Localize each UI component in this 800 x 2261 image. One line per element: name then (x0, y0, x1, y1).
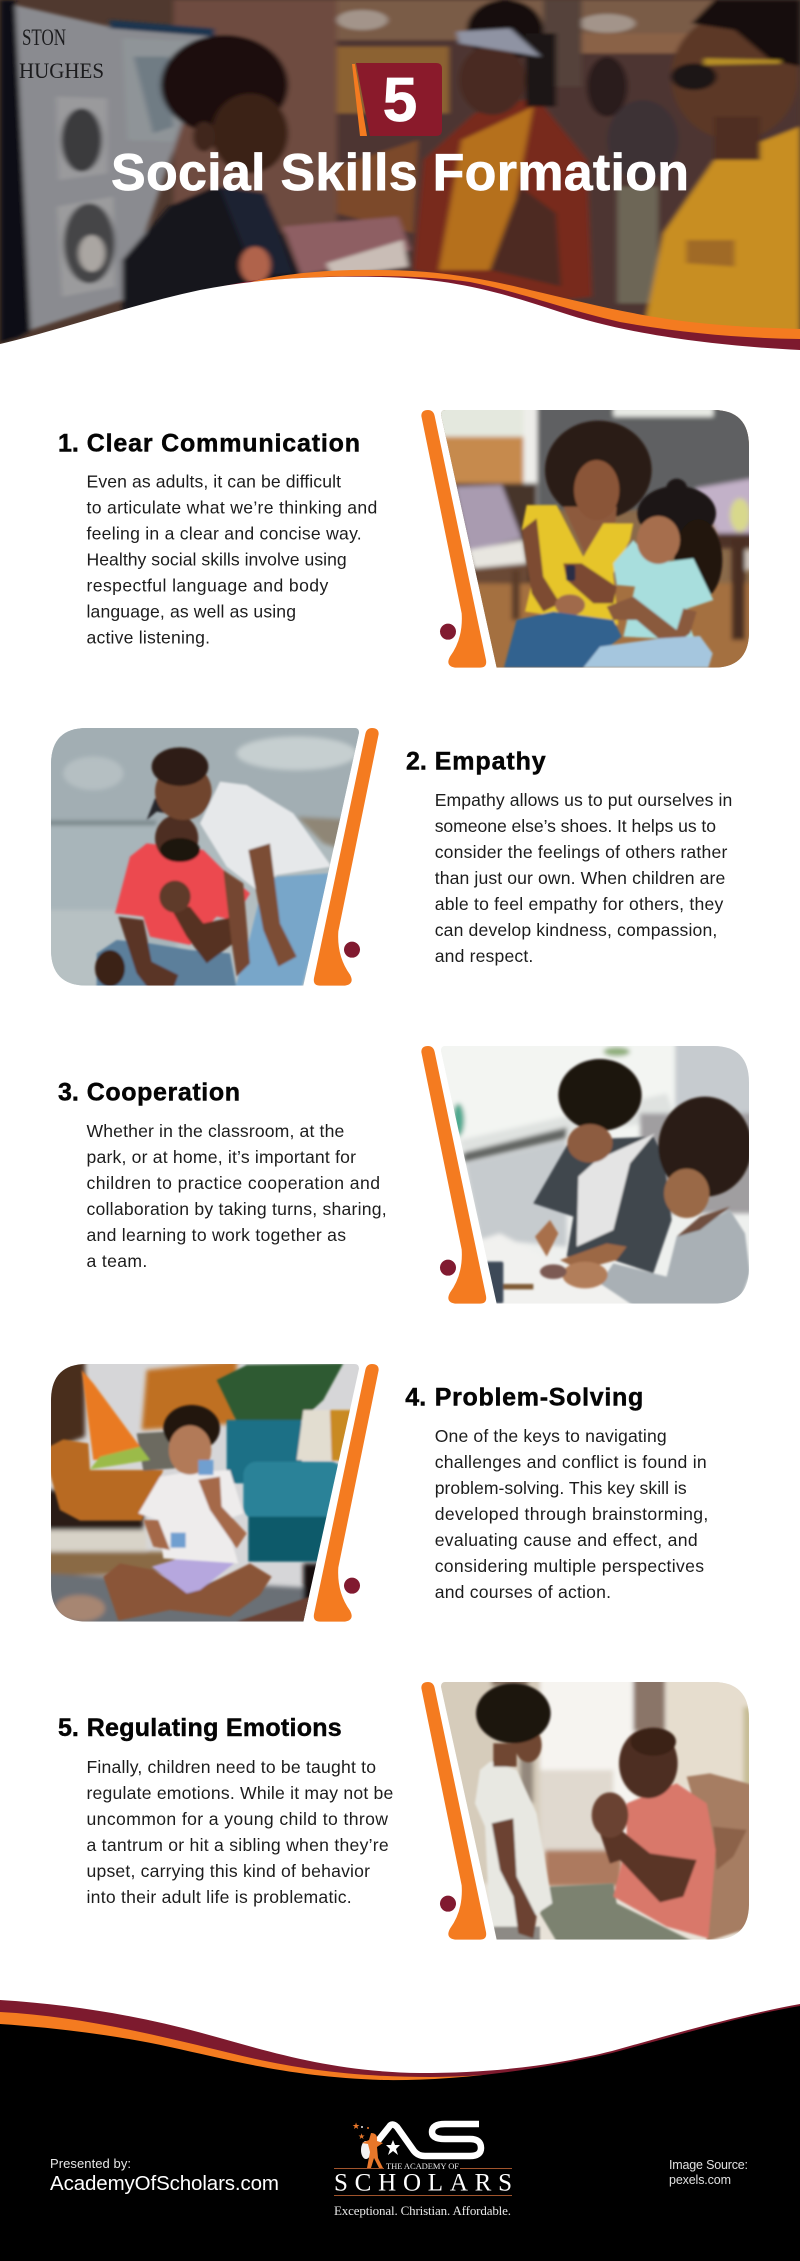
body text 2: consider the feelings of others rather (435, 842, 727, 862)
image source: pexels.com (669, 2173, 731, 2187)
number badge: 5 (383, 66, 417, 135)
body text 4: and courses of action. (435, 1582, 611, 1602)
body text 1: to articulate what we’re thinking and (86, 498, 377, 518)
heading 5: Regulating Emotions (87, 1714, 342, 1742)
section 3: cooperation (58, 1040, 757, 1310)
body text 3: park, or at home, it’s important for (86, 1147, 356, 1167)
presented by: Presented by: (50, 2156, 131, 2171)
heading 1: 1. (58, 430, 79, 458)
body text 1: Even as adults, it can be difficult (86, 472, 341, 492)
body text 4: problem-solving. This key skill is (435, 1478, 687, 1498)
section 5: regulating emotions (58, 1677, 757, 1947)
body text 1: active listening. (86, 628, 210, 648)
logo: The Academy of Scholars (334, 2121, 512, 2218)
header wave: white edge (0, 277, 800, 400)
logo: The Academy of Scholars: Exceptional. Christian. Affordable. (334, 2203, 511, 2218)
heading 2: Empathy (435, 747, 546, 775)
accent bar with dot 5 (421, 1682, 486, 1940)
photo 4: girl playing with blocks (51, 1364, 359, 1622)
body text 2 (435, 790, 732, 966)
body text 4: considering multiple perspectives (435, 1556, 704, 1576)
logo: The Academy of Scholars: THE ACADEMY OF (386, 2161, 459, 2171)
body text 3: Whether in the classroom, at the (86, 1121, 344, 1141)
section 2: empathy (43, 720, 732, 993)
section 1: clear communication (58, 403, 757, 673)
photo 1: mother and daughter (433, 403, 757, 673)
accent bar with dot 2 (314, 728, 379, 986)
header wave: maroon band (100, 271, 800, 360)
photo 3: two children at a table (433, 1040, 757, 1310)
logo mark (352, 2121, 481, 2168)
heading 2: 2. (406, 747, 427, 775)
body text 3: a team. (86, 1251, 147, 1271)
body text 2: Empathy allows us to put ourselves in (435, 790, 732, 810)
image source: Image Source: (669, 2158, 748, 2172)
photo 5: father talking to son (433, 1677, 757, 1947)
heading 3: 3. (58, 1079, 79, 1107)
logo: The Academy of Scholars: SCHOLARS (334, 2170, 512, 2196)
body text 5: Finally, children need to be taught to (86, 1757, 376, 1777)
body text 1: Healthy social skills involve using (86, 550, 347, 570)
body text 5 (86, 1757, 393, 1907)
logo mark: ★ (358, 2132, 365, 2141)
presented by (50, 2156, 279, 2195)
body text 3 (86, 1121, 387, 1271)
presented by: AcademyOfScholars.com (50, 2172, 279, 2195)
body text 2: and respect. (435, 946, 533, 966)
footer wave: maroon band (0, 2000, 800, 2100)
accent bar with dot 3 (421, 1046, 486, 1304)
heading 1: Clear Communication (87, 430, 360, 458)
title: Social Skills Formation (111, 144, 689, 202)
body text 2: than just our own. When children are (435, 868, 725, 888)
body text 5: into their adult life is problematic. (86, 1887, 352, 1907)
footer background (0, 2006, 800, 2261)
header banner photo: STON (22, 25, 66, 50)
body text 1: feeling in a clear and concise way. (86, 524, 362, 544)
body text 1 (86, 472, 377, 648)
body text 4 (435, 1426, 708, 1602)
body text 3: collaboration by taking turns, sharing, (86, 1199, 387, 1219)
body text 4: developed through brainstorming, (435, 1504, 708, 1524)
body text 1: language, as well as using (86, 602, 296, 622)
body text 5: regulate emotions. While it may not be (86, 1783, 393, 1803)
logo mark: ★ (352, 2121, 360, 2131)
body text 4: One of the keys to navigating (435, 1426, 667, 1446)
accent bar with dot 1 (421, 410, 486, 668)
body text 4: evaluating cause and effect, and (435, 1530, 698, 1550)
footer wave: orange band (0, 2012, 520, 2095)
body text 5: a tantrum or hit a sibling when they’re (86, 1835, 389, 1855)
body text 5: upset, carrying this kind of behavior (86, 1861, 370, 1881)
photo 2: father and son by the water (51, 728, 359, 986)
header banner photo (0, 0, 800, 353)
heading 3: Cooperation (87, 1079, 240, 1107)
body text 3: and learning to work together as (86, 1225, 346, 1245)
heading 4: Problem-Solving (435, 1383, 643, 1411)
header wave: orange band (250, 270, 800, 339)
body text 5: uncommon for a young child to throw (86, 1809, 388, 1829)
section 4: problem-solving (43, 1357, 708, 1630)
heading 4: 4. (405, 1383, 426, 1411)
body text 2: can develop kindness, compassion, (435, 920, 717, 940)
image source (669, 2158, 748, 2187)
body text 2: able to feel empathy for others, they (435, 894, 724, 914)
body text 4: challenges and conflict is found in (435, 1452, 707, 1472)
body text 3: children to practice cooperation and (86, 1173, 380, 1193)
heading 5: 5. (58, 1714, 79, 1742)
body text 2: someone else’s shoes. It helps us to (435, 816, 716, 836)
body text 1: respectful language and body (86, 576, 329, 596)
accent bar with dot 4 (314, 1364, 379, 1622)
header banner photo: HUGHES (19, 58, 104, 83)
number badge (352, 63, 442, 136)
